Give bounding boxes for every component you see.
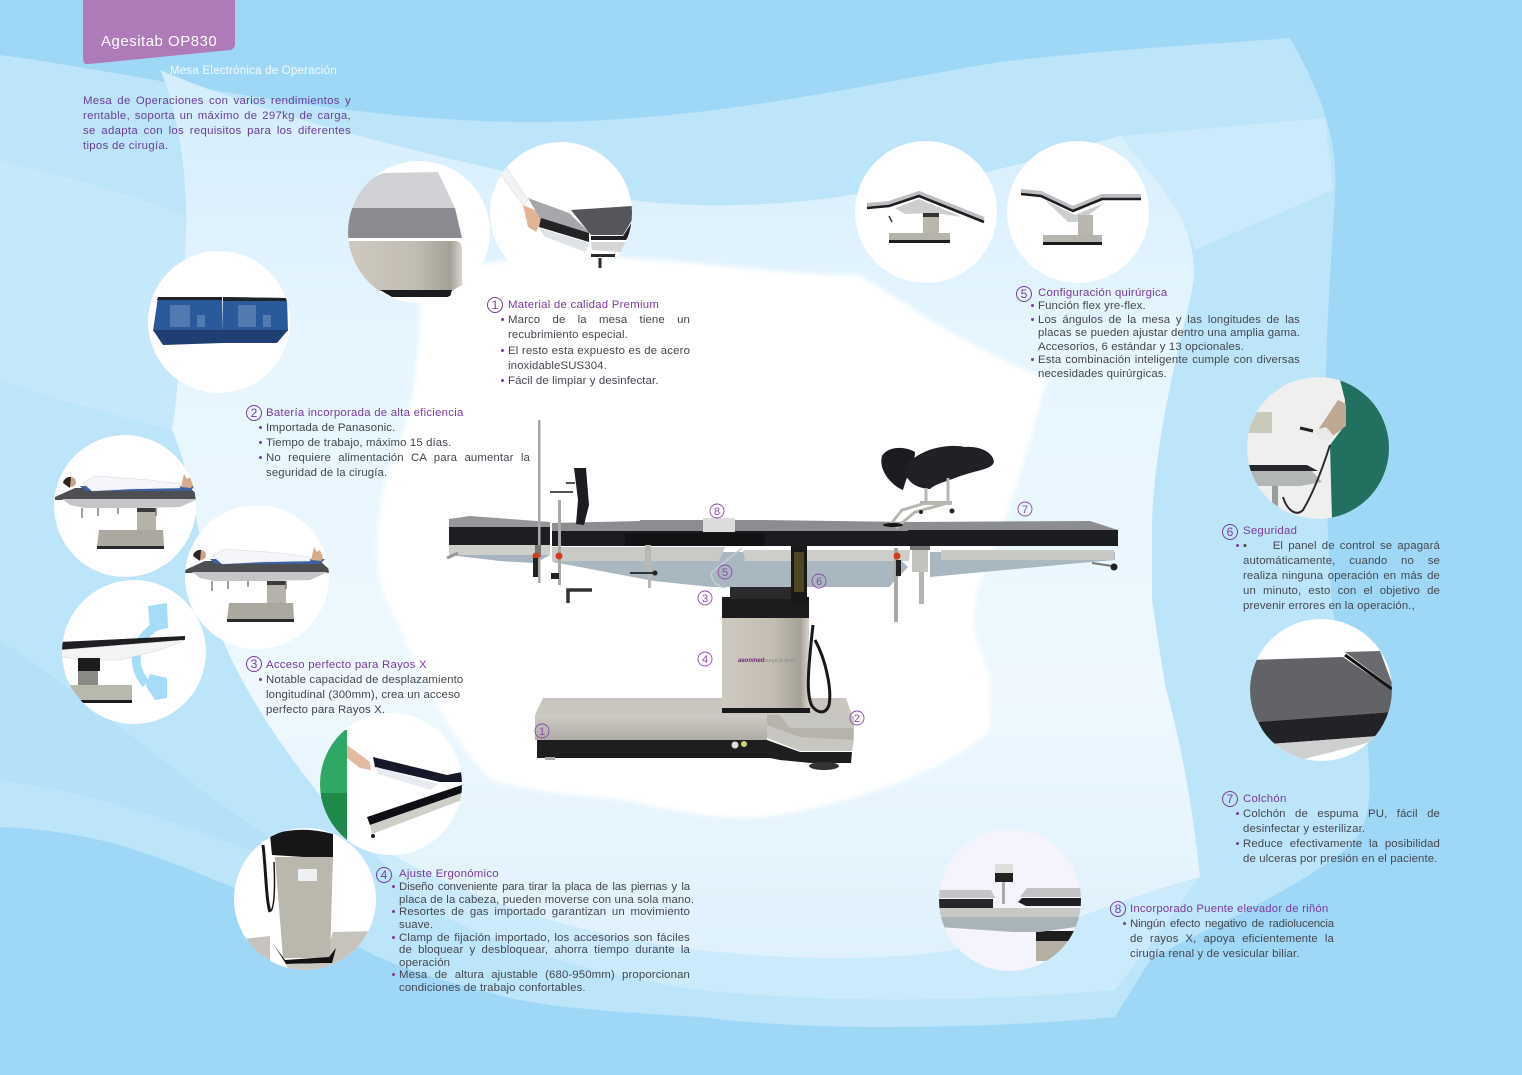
- title tab: Agesitab OP830: [101, 33, 217, 50]
- intro paragraph: se adapta con los requisitos para los diferentes: [83, 125, 351, 137]
- text block 1: premium material: inoxidableSUS304.: [508, 360, 607, 372]
- photo: X-ray access with C-arm: [60, 580, 207, 726]
- text block 5: surgical configuration: placas se pueden ajustar dentro una amplia gama.: [1038, 327, 1300, 339]
- title tab: [83, 0, 235, 64]
- text block 7: mattress: [1222, 791, 1440, 864]
- text block 3: X-ray access: [246, 656, 463, 716]
- text block 5: surgical configuration: necesidades quirúrgicas.: [1038, 368, 1167, 380]
- text block 2: battery: Importada de Panasonic.: [266, 422, 395, 434]
- photo: table in reverse flex position: [1007, 141, 1151, 285]
- text block 4: ergonomic adjustment: Mesa de altura ajustable (680-950mm) proporcionan: [399, 969, 690, 981]
- text block 1: premium material: El resto esta expuesto es de acero: [508, 345, 690, 357]
- text block 7: mattress: de ulceras por presión en el paciente.: [1243, 852, 1438, 864]
- text block 7: mattress: Reduce efectivamente la posibilidad: [1243, 838, 1440, 850]
- photo: operator with control pendant: [1247, 377, 1391, 521]
- head section: [447, 516, 550, 563]
- photo: patient on table 1: [53, 434, 200, 578]
- leg side clamps: [894, 548, 1118, 622]
- text block 4: ergonomic adjustment: placa de la cabeza, pueden moverse con una sola mano.: [399, 894, 694, 906]
- anesthesia screen rod: [532, 420, 541, 583]
- central mattress: [552, 518, 912, 588]
- text block 1: premium material: recubrimiento especial.: [508, 329, 628, 341]
- table column: [722, 587, 810, 713]
- heading 3: Acceso perfecto para Rayos X: [266, 659, 427, 671]
- intro paragraph: tipos de cirugía.: [83, 140, 169, 152]
- number 5: 5: [1021, 286, 1027, 300]
- photo: PU mattress detail: [1250, 619, 1394, 763]
- heading 7: Colchón: [1243, 792, 1287, 804]
- heading 4: Ajuste Ergonómico: [399, 868, 499, 880]
- product callout numbers: 5: [722, 567, 728, 579]
- product callout numbers: [535, 502, 1032, 738]
- text block 1: premium material: [487, 297, 690, 387]
- text block 6: safety: realiza ninguna operación en más de: [1243, 570, 1440, 582]
- intro paragraph: Mesa de Operaciones con varios rendimientos y: [83, 95, 351, 107]
- text block 1: premium material: Marco de la mesa tiene un: [508, 314, 690, 326]
- product callout numbers: 4: [702, 654, 708, 666]
- control pendant: [791, 546, 807, 605]
- head side support: [550, 468, 592, 603]
- text block 4: ergonomic adjustment: Resortes de gas importado garantizan un movimiento: [399, 906, 690, 918]
- text block 4: ergonomic adjustment: suave.: [399, 918, 433, 930]
- number 6: 6: [1227, 525, 1233, 539]
- text block 6: safety: prevenir errores en la operación.,: [1243, 600, 1415, 612]
- text block 1: premium material: Fácil de limpiar y desinfectar.: [508, 375, 659, 387]
- text block 3: X-ray access: Notable capacidad de desplazamiento: [266, 674, 463, 686]
- text block 8: kidney bridge: cirugía renal y de vesicular biliar.: [1130, 948, 1300, 960]
- text block 2: battery: Tiempo de trabajo, máximo 15 días.: [266, 437, 451, 449]
- text block 5: surgical configuration: Los ángulos de la mesa y las longitudes de las: [1038, 314, 1300, 326]
- number 1: [487, 297, 503, 313]
- text block 3: X-ray access: longitudinal (300mm), crea un acceso: [266, 689, 460, 701]
- text block 2: battery: [246, 405, 530, 479]
- product callout numbers: 1: [539, 726, 545, 738]
- photo: kidney bridge detail: [939, 829, 1084, 973]
- heading 5: Configuración quirúrgica: [1038, 286, 1167, 298]
- number 4: 4: [381, 868, 387, 882]
- number 8: [1110, 900, 1126, 916]
- heading 6: Seguridad: [1243, 525, 1297, 537]
- number 3: 3: [251, 657, 257, 671]
- photo: patient on table 2: [184, 504, 330, 650]
- text block 4: ergonomic adjustment: condiciones de trabajo confortables.: [399, 982, 586, 994]
- text block 4: ergonomic adjustment: de bloquear y desbloquear, ahorra tiempo durante la: [399, 944, 690, 956]
- intro paragraph: [83, 95, 351, 152]
- heading 1: Material de calidad Premium: [508, 299, 659, 311]
- number 2: 2: [251, 406, 257, 420]
- leg support: [881, 446, 994, 528]
- text block 5: surgical configuration: [1016, 286, 1300, 380]
- text block 4: ergonomic adjustment: Diseño conveniente para tirar la placa de las piernas y la: [399, 881, 690, 893]
- text block 8: kidney bridge: Ningún efecto negativo de radiolucencia: [1130, 918, 1334, 930]
- main illustration: operating table: [447, 420, 1118, 770]
- photo circles and main product illustrations: [54, 141, 1392, 971]
- photo: nurse lowering leg plate: [318, 713, 463, 857]
- photo: cushion corner detail: [345, 161, 491, 303]
- product callout numbers: 3: [702, 593, 708, 605]
- number 2: [246, 405, 262, 421]
- leg body panel: [930, 552, 1115, 577]
- text block 4: ergonomic adjustment: [376, 867, 694, 994]
- text block 3: X-ray access: perfecto para Rayos X.: [266, 704, 385, 716]
- product callout numbers: 2: [854, 713, 860, 725]
- table column: surgical lines: [764, 658, 796, 664]
- text block 6: safety: automáticamente, cuando no se: [1243, 555, 1440, 567]
- text block 5: surgical configuration: Función flex yre-flex.: [1038, 300, 1146, 312]
- text block 5: surgical configuration: Accesorios, 6 estándar y 13 opcionales.: [1038, 340, 1244, 352]
- text block 6: safety: [1222, 524, 1440, 612]
- central body panel: [553, 552, 908, 587]
- heading 8: Incorporado Puente elevador de riñón: [1130, 902, 1328, 914]
- number 1: 1: [492, 298, 498, 312]
- number 3: [246, 656, 262, 672]
- number 4: [376, 867, 392, 883]
- leg mattress: [908, 521, 1118, 560]
- text block 8: kidney bridge: de rayos X, apoya eficientemente la: [1130, 932, 1334, 944]
- product callout numbers: 6: [816, 576, 822, 588]
- text block 7: mattress: desinfectar y esterilizar.: [1243, 822, 1365, 834]
- product callout numbers: 7: [1022, 504, 1028, 516]
- text block 6: safety: • El panel de control se apagará: [1243, 540, 1440, 552]
- number 8: 8: [1115, 902, 1121, 916]
- text block 2: battery: seguridad de la cirugía.: [266, 467, 387, 479]
- text block 4: ergonomic adjustment: Clamp de fijación importado, los accesorios son fáciles: [399, 932, 690, 944]
- text block 8: kidney bridge: [1110, 901, 1334, 960]
- intro paragraph: rentable, soporta un máximo de 297kg de carga,: [83, 110, 351, 122]
- power cable: [808, 625, 830, 712]
- heading 2: Batería incorporada de alta eficiencia: [266, 407, 464, 419]
- text block 6: safety: un minuto, esto con el objetivo de: [1243, 585, 1440, 597]
- product callout numbers: 8: [714, 506, 720, 518]
- number 6: [1222, 524, 1238, 540]
- table column: aeonmed: [738, 658, 765, 664]
- number 7: 7: [1227, 792, 1233, 806]
- photo: batteries: [148, 251, 292, 395]
- photo: column with drape: [233, 827, 379, 975]
- number 5: [1016, 286, 1032, 302]
- text block 2: battery: No requiere alimentación CA para aumentar la: [266, 452, 530, 464]
- subtitle: Mesa Electrónica de Operación: [170, 65, 337, 77]
- text block 7: mattress: Colchón de espuma PU, fácil de: [1243, 808, 1440, 820]
- text block 5: surgical configuration: Esta combinación inteligente cumple con diversas: [1038, 354, 1300, 366]
- number 7: [1222, 790, 1238, 806]
- text block 4: ergonomic adjustment: operación: [399, 956, 450, 968]
- photo: hand lifting head section: [490, 142, 632, 268]
- arm clamp: [630, 545, 658, 588]
- photo: table in flex position: [855, 141, 999, 285]
- table base: [535, 698, 854, 770]
